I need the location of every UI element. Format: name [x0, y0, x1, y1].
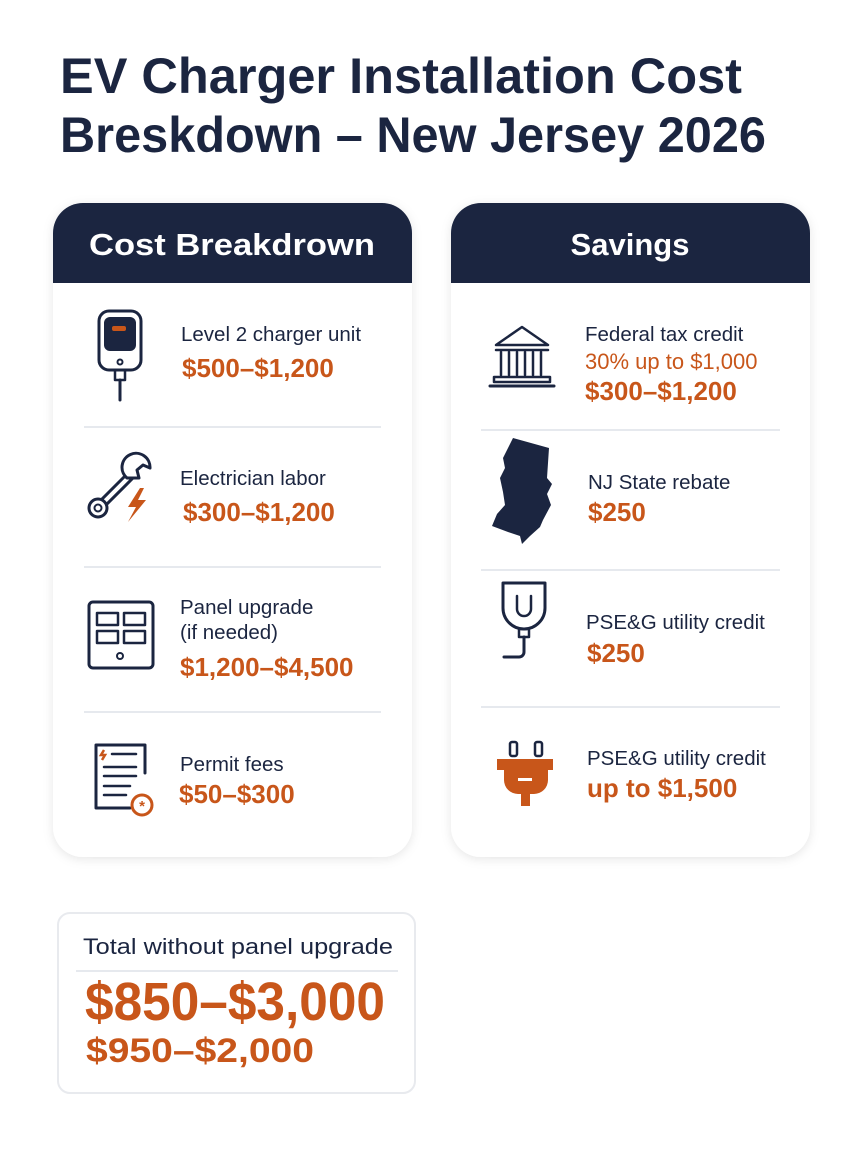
item: pse&g credit 1500: up to $1,500 — [587, 773, 737, 803]
heading: cost breakdown — [53, 203, 412, 283]
item: nj state rebate: NJ State rebate — [588, 471, 730, 494]
title: EV Charger Installation Cost — [60, 48, 742, 104]
item: charger unit — [181, 323, 361, 383]
item: permit fees: Permit fees — [180, 753, 284, 776]
item: pse&g credit 1500: PSE&G utility credit — [587, 747, 766, 770]
item: pse&g credit 250: $250 — [587, 638, 645, 668]
item: electrician labor: Electrician labor — [180, 467, 326, 490]
title: Breskdown – New Jersey 2026 — [60, 107, 766, 163]
item: federal tax credit — [585, 323, 757, 406]
total box: $950–$2,000 — [86, 1032, 314, 1070]
item: pse&g credit 1500 — [587, 747, 766, 803]
item: pse&g credit 250: PSE&G utility credit — [586, 611, 765, 634]
item: panel upgrade: $1,200–$4,500 — [180, 652, 354, 682]
item: federal tax credit: Federal tax credit — [585, 323, 744, 346]
panel: cost breakdown — [53, 203, 412, 857]
heading: savings — [451, 203, 810, 283]
item: nj state rebate: $250 — [588, 497, 646, 527]
icon: wrench and bolt — [89, 453, 150, 522]
icon: bank — [490, 327, 554, 386]
item: pse&g credit 250 — [586, 611, 765, 668]
item: nj state rebate — [588, 471, 730, 527]
icon: orange plug — [497, 742, 553, 806]
total box: Total without panel upgrade — [83, 934, 393, 959]
item: federal tax credit: $300–$1,200 — [585, 376, 737, 406]
item: permit fees — [179, 753, 295, 809]
item: electrician labor: $300–$1,200 — [183, 497, 335, 527]
icon: permit: * — [139, 798, 145, 815]
panel: savings — [451, 203, 810, 857]
item: panel upgrade — [180, 596, 354, 682]
item: electrician labor — [180, 467, 335, 527]
icon: plug outline — [503, 583, 545, 657]
icon: new jersey map — [492, 438, 552, 544]
icon: permit — [96, 745, 152, 815]
total box — [58, 913, 415, 1093]
item: permit fees: $50–$300 — [179, 779, 295, 809]
title — [60, 48, 766, 163]
item: charger unit: $500–$1,200 — [182, 353, 334, 383]
heading: savings: Savings — [571, 227, 689, 262]
item: federal tax credit: 30% up to $1,000 — [585, 349, 757, 374]
icon: charger — [99, 311, 141, 400]
item: panel upgrade: (if needed) — [180, 621, 278, 644]
icon: panel — [89, 602, 153, 668]
heading: cost breakdown: Cost Breakdrown — [89, 227, 375, 262]
total box: $850–$3,000 — [85, 972, 385, 1032]
item: charger unit: Level 2 charger unit — [181, 323, 361, 346]
item: panel upgrade: Panel upgrade — [180, 596, 313, 619]
